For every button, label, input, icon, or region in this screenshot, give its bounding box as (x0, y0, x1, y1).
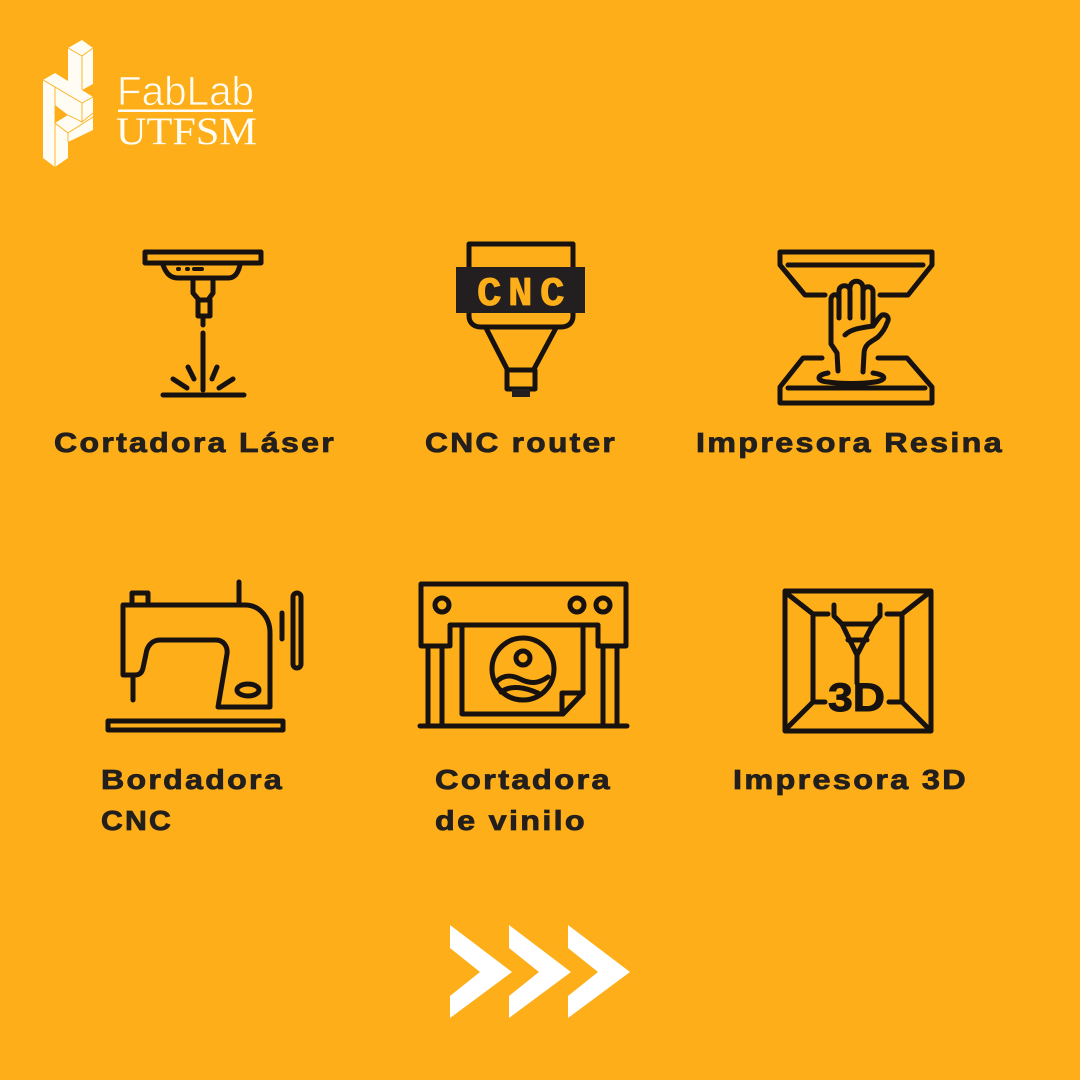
3D lettering: 3D (828, 676, 885, 720)
logo: FabLab UTFSM (43, 40, 257, 167)
label: Cortadora de vinilo: Cortadora (435, 764, 612, 795)
label: Impresora 3D: Impresora 3D (733, 764, 968, 795)
CNC lettering: CNC (477, 272, 565, 318)
logo mark (43, 40, 93, 167)
label: Cortadora Láser: Cortadora Láser (54, 427, 336, 458)
icon: 3D printer (785, 591, 931, 731)
icon: vinyl cutter (420, 584, 627, 726)
label: Cortadora de vinilo (435, 764, 612, 836)
icon: CNC router (456, 244, 585, 397)
logo text UTFSM: UTFSM (116, 110, 257, 153)
icon: CNC embroidery machine (108, 582, 301, 730)
label: CNC router: CNC router (425, 427, 617, 458)
label: Bordadora CNC: CNC (101, 805, 173, 836)
arrows: next (450, 925, 630, 1018)
icon: laser cutter (145, 252, 261, 395)
label: Impresora Resina: Impresora Resina (696, 427, 1004, 458)
label: Cortadora de vinilo: de vinilo (435, 805, 587, 836)
label: Bordadora CNC: Bordadora (101, 764, 284, 795)
label: Bordadora CNC (101, 764, 284, 836)
icon: resin printer (780, 252, 932, 403)
logo text FabLab: FabLab (117, 68, 254, 114)
